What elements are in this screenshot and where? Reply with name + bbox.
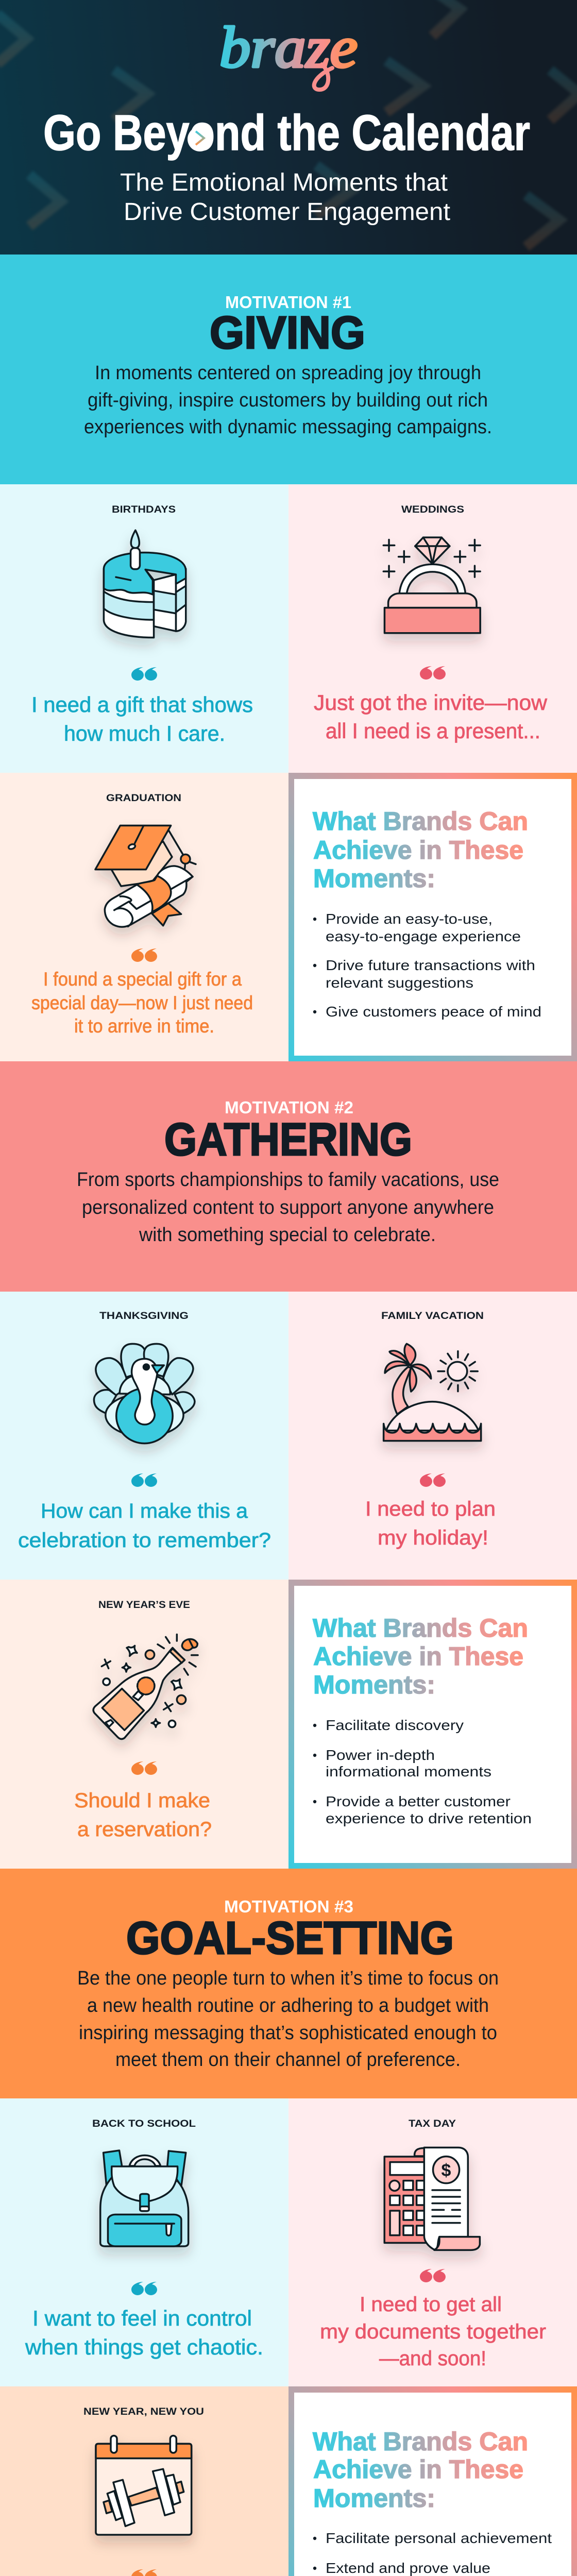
quote mark bbox=[131, 948, 157, 962]
quote: How can I make this a bbox=[41, 1500, 248, 1522]
panel: motivation 2 gathering bbox=[0, 1061, 577, 1292]
quote: Just got the invite—now bbox=[314, 690, 548, 715]
panel heading bbox=[313, 1614, 528, 1699]
quote bbox=[74, 1789, 212, 1841]
quote bbox=[31, 969, 253, 1037]
panel heading: Achieve in These bbox=[313, 1642, 523, 1671]
heading: GATHERING bbox=[164, 1113, 412, 1165]
subtitle: Drive Customer Engagement bbox=[124, 198, 450, 226]
icon: calendar with dumbbell bbox=[96, 2436, 192, 2535]
bullet list: Give customers peace of mind bbox=[326, 1004, 541, 1020]
label: FAMILY VACATION bbox=[381, 1311, 484, 1321]
quote: how much I care. bbox=[64, 721, 225, 745]
icon: dollar sign: $ bbox=[442, 2161, 451, 2180]
heading: GIVING bbox=[210, 307, 365, 358]
quote: I need to get all bbox=[360, 2293, 502, 2316]
bullet list: Provide an easy-to-use, bbox=[326, 911, 493, 927]
description bbox=[77, 1968, 499, 2071]
heading: GOAL-SETTING bbox=[126, 1912, 454, 1963]
card: weddings bbox=[288, 484, 577, 773]
header banner bbox=[0, 0, 577, 255]
bullet list bbox=[313, 1717, 532, 1826]
panel heading: What Brands Can bbox=[313, 1614, 528, 1642]
panel: motivation 3 goal-setting bbox=[0, 1869, 577, 2098]
quote mark bbox=[420, 2269, 446, 2282]
icon: backpack bbox=[100, 2150, 189, 2246]
bullet list: easy-to-engage experience bbox=[326, 928, 521, 944]
quote mark bbox=[131, 667, 157, 681]
quote bbox=[314, 690, 548, 743]
label: WEDDINGS bbox=[401, 504, 464, 515]
description: In moments centered on spreading joy through bbox=[95, 362, 481, 384]
description bbox=[77, 1169, 499, 1246]
subtitle: The Emotional Moments that bbox=[120, 169, 448, 196]
label: NEW YEAR, NEW YOU bbox=[83, 2406, 204, 2417]
card: new year new you bbox=[0, 2386, 288, 2576]
quote: I found a special gift for a bbox=[43, 969, 242, 990]
panel: what brands can achieve 1 bbox=[288, 773, 577, 1061]
bullet list: Provide a better customer bbox=[326, 1793, 511, 1809]
card: new year's eve bbox=[0, 1580, 288, 1869]
bullet list: relevant suggestions bbox=[326, 975, 473, 991]
bullet list: Facilitate discovery bbox=[326, 1717, 464, 1733]
description: experiences with dynamic messaging campaigns. bbox=[84, 416, 492, 438]
braze logo: braze bbox=[219, 15, 358, 80]
quote bbox=[25, 2306, 263, 2359]
quote: celebration to remember? bbox=[18, 1529, 271, 1552]
eyebrow: MOTIVATION #3 bbox=[224, 1897, 353, 1916]
quote bbox=[320, 2293, 546, 2370]
card: family vacation bbox=[288, 1292, 577, 1580]
panel heading: Moments: bbox=[313, 2484, 435, 2513]
panel: what brands can achieve 3 bbox=[288, 2386, 577, 2576]
panel heading: What Brands Can bbox=[313, 807, 528, 836]
icon: champagne bottle bbox=[93, 1634, 198, 1739]
panel heading: What Brands Can bbox=[313, 2427, 528, 2456]
bullet list bbox=[313, 911, 541, 1020]
label: GRADUATION bbox=[106, 793, 181, 804]
quote: a reservation? bbox=[77, 1818, 212, 1841]
description: inspiring messaging that’s sophisticated enough to bbox=[79, 2022, 497, 2044]
quote bbox=[18, 1500, 271, 1552]
quote: all I need is a present... bbox=[326, 719, 540, 743]
quote mark bbox=[131, 1761, 157, 1775]
bullet list bbox=[313, 2530, 552, 2576]
quote mark bbox=[131, 2282, 157, 2295]
label: NEW YEAR’S EVE bbox=[98, 1600, 190, 1611]
panel heading: Moments: bbox=[313, 864, 435, 893]
description: with something special to celebrate. bbox=[139, 1224, 436, 1246]
card: tax day bbox=[288, 2098, 577, 2386]
bullet list: Drive future transactions with bbox=[326, 957, 535, 973]
description: meet them on their channel of preference. bbox=[115, 2049, 461, 2071]
quote bbox=[365, 1498, 496, 1549]
panel: motivation 1 giving bbox=[0, 255, 577, 484]
card: thanksgiving bbox=[0, 1292, 288, 1580]
eyebrow: MOTIVATION #2 bbox=[225, 1098, 353, 1117]
quote: my documents together bbox=[320, 2320, 546, 2343]
panel heading: Achieve in These bbox=[313, 2455, 523, 2484]
bullet list: Power in-depth bbox=[326, 1747, 435, 1763]
eyebrow: MOTIVATION #1 bbox=[225, 293, 351, 312]
icon: turkey bbox=[94, 1344, 195, 1444]
quote bbox=[31, 692, 253, 745]
quote mark bbox=[131, 1473, 157, 1487]
bullet list: Facilitate personal achievement bbox=[326, 2530, 552, 2546]
quote: —and soon! bbox=[379, 2347, 486, 2370]
quote: special day—now I just need bbox=[31, 992, 253, 1013]
card: graduation bbox=[0, 773, 288, 1061]
subtitle bbox=[120, 169, 450, 226]
quote: Should I make bbox=[74, 1789, 210, 1812]
quote: when things get chaotic. bbox=[25, 2335, 263, 2359]
quote mark bbox=[420, 1473, 446, 1487]
description bbox=[84, 362, 492, 438]
panel heading: Moments: bbox=[313, 1670, 435, 1699]
description: From sports championships to family vacations, use bbox=[77, 1169, 499, 1191]
label: THANKSGIVING bbox=[99, 1311, 189, 1321]
panel heading bbox=[313, 807, 528, 893]
quote: I need to plan bbox=[365, 1498, 496, 1520]
description: Be the one people turn to when it’s time to focus on bbox=[77, 1968, 499, 1989]
panel: what brands can achieve 2 bbox=[288, 1580, 577, 1869]
icon: graduation cap and diploma bbox=[95, 825, 196, 927]
icon: palm island bbox=[384, 1344, 481, 1441]
description: a new health routine or adhering to a budget with bbox=[87, 1995, 489, 2016]
bullet list: experience to drive retention bbox=[326, 1810, 532, 1826]
quote: I need a gift that shows bbox=[31, 692, 253, 717]
label: BIRTHDAYS bbox=[112, 504, 176, 515]
icon: birthday cake bbox=[104, 530, 186, 638]
bullet list: Extend and prove value bbox=[326, 2560, 490, 2576]
panel heading bbox=[313, 2427, 528, 2513]
description: gift-giving, inspire customers by building out rich bbox=[88, 389, 488, 411]
quote: I want to feel in control bbox=[32, 2306, 252, 2330]
icon: calculator and receipt bbox=[384, 2147, 480, 2250]
bullet list: informational moments bbox=[326, 1764, 491, 1780]
label: TAX DAY bbox=[409, 2119, 456, 2129]
quote: it to arrive in time. bbox=[74, 1015, 214, 1037]
quote: my holiday! bbox=[378, 1527, 488, 1549]
label: BACK TO SCHOOL bbox=[92, 2119, 196, 2129]
quote mark bbox=[420, 666, 446, 680]
quote mark bbox=[131, 2569, 157, 2576]
card: birthdays bbox=[0, 484, 288, 773]
panel heading: Achieve in These bbox=[313, 836, 523, 865]
card: back to school bbox=[0, 2098, 288, 2386]
icon: diamond ring bbox=[383, 537, 480, 633]
description: personalized content to support anyone anywhere bbox=[82, 1197, 494, 1218]
